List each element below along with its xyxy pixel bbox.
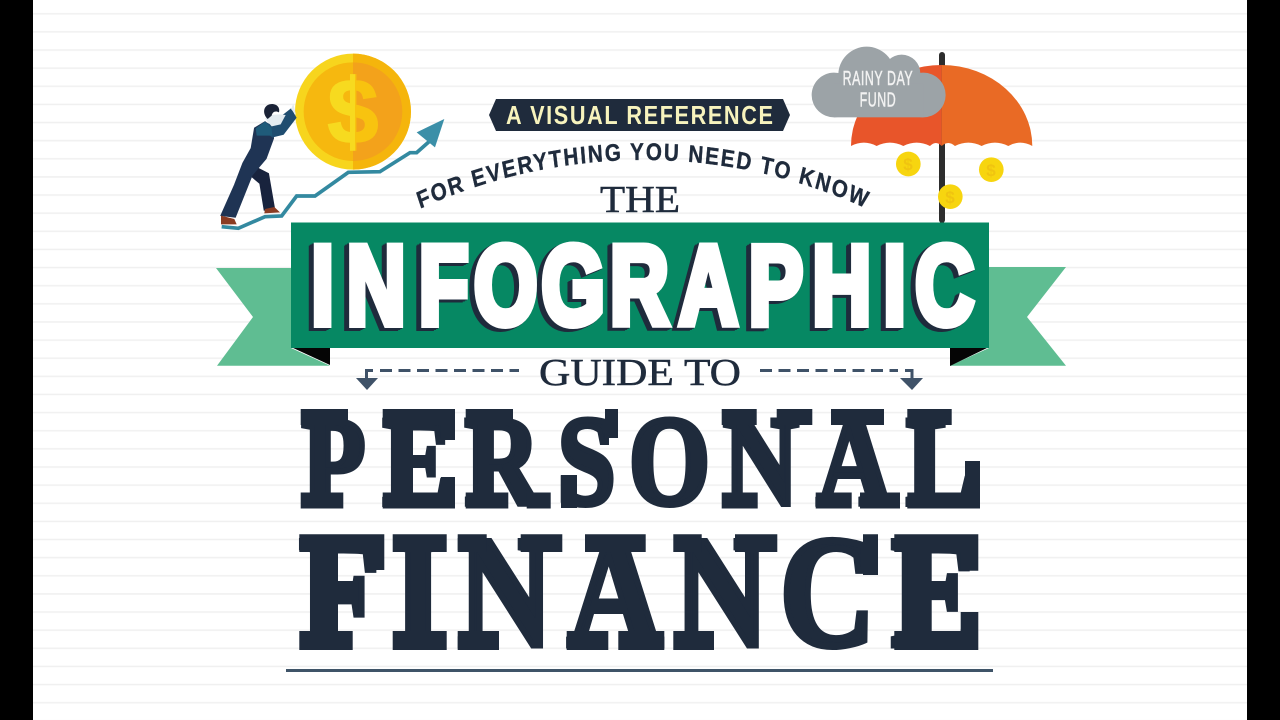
title: guide to: GUIDE TO (539, 352, 741, 394)
icon: falling coins (896, 152, 1004, 209)
ribbon tails (216, 267, 1066, 366)
icon: cloud (812, 47, 946, 117)
arrow: left dashed (356, 370, 519, 390)
icon: umbrella canopy (851, 65, 1032, 146)
coin symbols: $ (945, 188, 955, 207)
arrow: right dashed (760, 370, 923, 390)
bottom rule (286, 669, 993, 672)
tag: a visual reference: A VISUAL REFERENCE (506, 102, 773, 130)
icon: umbrella pole (939, 52, 945, 223)
title: infographic: INFOGRAPHIC (311, 222, 974, 348)
coin dollar sign: $ (327, 61, 379, 163)
icon: gold dollar coin (295, 54, 411, 170)
coin symbols: $ (986, 161, 996, 180)
icon: businessman (221, 104, 296, 224)
curved subtitle: FOR EVERYTHING YOU NEED TO KNOW (416, 143, 870, 208)
title: the: THE (600, 179, 680, 221)
green banner (291, 222, 989, 348)
arrow: rising teal line (222, 119, 444, 228)
coin symbols (903, 155, 996, 207)
coin symbols: $ (903, 155, 913, 174)
title: finance: FINANCE (300, 506, 979, 680)
cloud label: RAINY DAY (843, 67, 913, 90)
title: personal: PERSONAL (302, 392, 976, 532)
cloud label: FUND (860, 88, 896, 111)
